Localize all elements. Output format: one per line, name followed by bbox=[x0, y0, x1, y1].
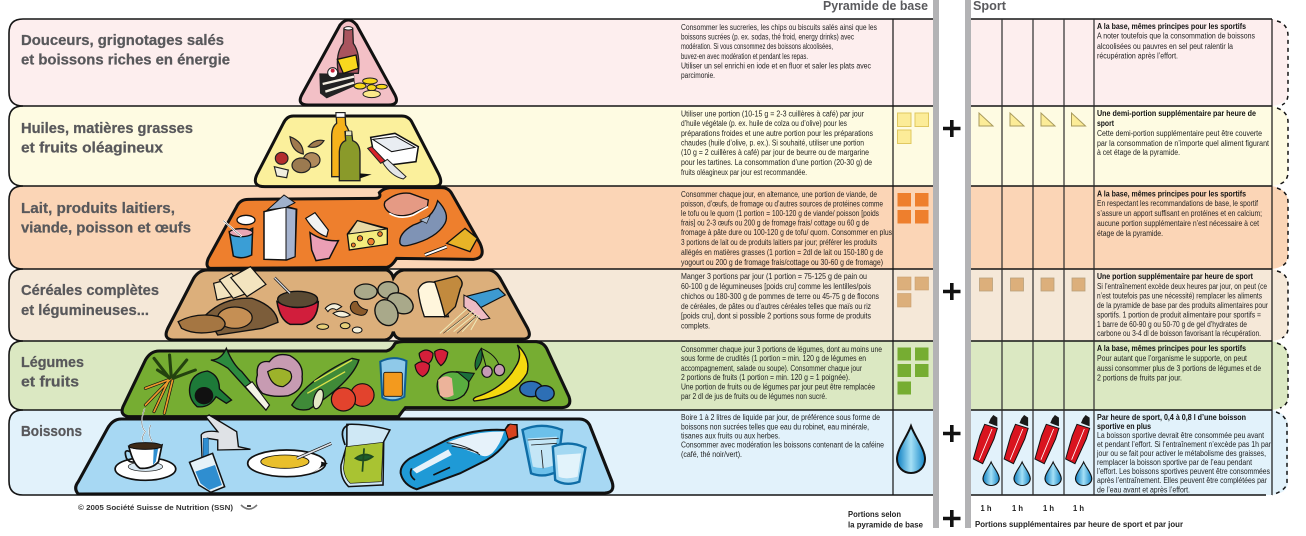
text: dairy recommendation: fromage à pâte dure ou 100-120 g de tofu/ quorn. Consommer en plus bbox=[681, 228, 892, 237]
sport text: cereals: de la pyramide de base par des produits alimentaires pour bbox=[1097, 301, 1268, 310]
sport text: cereals: carbone ou 3-4 dl de boisson favorisant la récupération. bbox=[1097, 329, 1261, 338]
sport text: vegetables: A la base, mêmes principes pour les sportifs bbox=[1097, 344, 1247, 353]
hour labels: 1 h bbox=[980, 504, 992, 513]
text: vegetables recommendation: accompagnement, salade ou soupe). Consommer chaque jour bbox=[681, 364, 862, 373]
copyright: © 2005 Société Suisse de Nutrition (SSN) bbox=[78, 503, 234, 512]
text: vegetables recommendation: 2 portions de fruits (1 portion = min. 120 g = 1 poignée). bbox=[681, 373, 850, 382]
heading: Lait bbox=[21, 200, 191, 236]
text: vegetables recommendation: Une portion de fruits ou de légumes par jour peut être remplacée bbox=[681, 382, 875, 392]
heading: Légumes bbox=[21, 354, 84, 390]
sport text: oils: Une demi-portion supplémentaire par heure de bbox=[1097, 109, 1257, 118]
text: beverages recommendation: Consommer avec modération les boissons contenant de la caféine bbox=[681, 440, 884, 450]
heading: Céréales: Céréales complètes bbox=[21, 282, 159, 299]
text: sweets recommendation: parcimonie. bbox=[681, 71, 715, 80]
footer label: base portions bbox=[848, 510, 924, 530]
text: oils recommendation: Utiliser une portion (10-15 g = 2-3 cuillères à café) par jour bbox=[681, 110, 864, 118]
dashed braces bbox=[1272, 21, 1288, 495]
text: vegetables recommendation: par 2 dl de jus de fruits ou de légumes non sucré. bbox=[681, 392, 827, 401]
text: dairy recommendation bbox=[681, 190, 892, 267]
text: sweets recommendation: boissons sucrées (p. ex. sodas, thé froid, energy drinks) avec bbox=[681, 33, 854, 42]
text: sweets recommendation: buvez-en avec modération et pendant les repas. bbox=[681, 52, 808, 61]
text: oils recommendation bbox=[681, 110, 873, 177]
text: sweets recommendation: Consommer les sucreries, les chips ou biscuits salés ainsi que les bbox=[681, 23, 877, 32]
sport text: beverages: sportive en plus bbox=[1097, 422, 1152, 431]
heading: Huiles bbox=[21, 120, 193, 156]
sport text: oils bbox=[1097, 109, 1270, 157]
heading: Boissons: Boissons bbox=[21, 423, 82, 440]
text: beverages recommendation bbox=[681, 413, 884, 459]
sport text: dairy: étage de la pyramide. bbox=[1097, 229, 1163, 238]
heading: Douceurs: Douceurs, grignotages salés bbox=[21, 32, 224, 49]
text: dairy recommendation: poisson, d’œufs, de fromage ou d’autres sources de protéines comme bbox=[681, 200, 883, 208]
text: oils recommendation: pour les tartines. La consommation d’une portion (20-30 g) de bbox=[681, 158, 872, 167]
pyramid level: dairy and meat bbox=[207, 188, 482, 268]
pyramid level: sweets bbox=[300, 20, 396, 105]
text: dairy recommendation: allégés en matières grasses (1 portion = 2dl de lait ou 150-180 g de bbox=[681, 248, 883, 257]
hour labels: 1 h bbox=[1073, 504, 1084, 513]
grey column bars bbox=[933, 0, 971, 528]
text: oils recommendation: (10 g = 2 cuillères à café) par jour de beurre ou de margarine bbox=[681, 148, 869, 157]
portion icons: oils bbox=[898, 113, 928, 144]
text: sweets recommendation: Utiliser un sel enrichi en iode et en fluor et saler les plats avec bbox=[681, 61, 871, 70]
footer label: base portions: Portions selon bbox=[848, 510, 901, 519]
sport text: sweets bbox=[1097, 22, 1255, 60]
sport text: oils: par la consommation de n’importe quel aliment figurant bbox=[1097, 139, 1270, 148]
text: oils recommendation: d’huile végétale (p. ex. huile de colza ou d’olive) pour les bbox=[681, 119, 847, 128]
text: dairy recommendation: Consommer chaque jour, en alternance, une portion de viande, de bbox=[681, 190, 877, 199]
text: cereals recommendation: 60-100 g de légumineuses [poids cru] comme les lentilles/pois bbox=[681, 282, 871, 291]
sport text: beverages: l’effort. Les boissons sportives peuvent être consommées bbox=[1097, 467, 1270, 476]
icon: water drop bbox=[897, 426, 925, 473]
text: vegetables recommendation: Consommer chaque jour 3 portions de légumes, dont au moins une bbox=[681, 345, 882, 354]
sport text: beverages: remplacer la boisson sportive par de l’eau pendant bbox=[1097, 458, 1253, 467]
pyramid level: cereals bbox=[166, 267, 529, 340]
sport text: cereals: 1 barre de 60-90 g ou 50-70 g de gel d’hydrates de bbox=[1097, 320, 1247, 329]
sport text: dairy: En respectant les recommandations de base, le sportif bbox=[1097, 199, 1259, 208]
heading: Légumes: et fruits bbox=[21, 374, 79, 390]
sport text: sweets: A noter toutefois que la consommation de boissons bbox=[1097, 32, 1255, 40]
text: sweets recommendation: modération. Si vous consommez des boissons alcoolisées, bbox=[681, 42, 833, 51]
heading: Huiles: Huiles, matières grasses bbox=[21, 120, 193, 137]
icon: SSN logo bbox=[241, 505, 257, 509]
heading: Douceurs: et boissons riches en énergie bbox=[21, 52, 230, 68]
sport text: vegetables bbox=[1097, 344, 1261, 382]
sport icons: bottles and drops bbox=[973, 415, 1092, 486]
sport text: sweets: A la base, mêmes principes pour les sportifs bbox=[1097, 22, 1247, 31]
sport text: dairy bbox=[1097, 190, 1262, 238]
sport text: beverages: après l’entraînement. Elles peuvent être complétées par bbox=[1097, 476, 1267, 485]
sport text: beverages: La boisson sportive devrait être consommée peu avant bbox=[1097, 431, 1265, 440]
text: dairy recommendation: yogourt ou 200 g de fromage frais/cottage ou 30-60 g de fromage) bbox=[681, 258, 883, 267]
text: beverages recommendation: Boire 1 à 2 litres de liquide par jour, de préférence sous forme de bbox=[681, 413, 880, 422]
heading: Céréales bbox=[21, 282, 159, 319]
sport icons: half portion triangles bbox=[979, 113, 1086, 126]
sport text: sweets: alcoolisées ou pauvres en sel peut ralentir la bbox=[1097, 42, 1234, 51]
text: vegetables recommendation bbox=[681, 345, 882, 401]
sport text: sweets: récupération après l’effort. bbox=[1097, 52, 1178, 60]
sport text: vegetables: Pour autant que l’organisme le supporte, on peut bbox=[1097, 354, 1248, 363]
hour labels: 1 h bbox=[1012, 504, 1023, 513]
sport text: beverages bbox=[1096, 413, 1271, 494]
heading: Légumes: Légumes bbox=[21, 354, 84, 371]
text: dairy recommendation: frais] ou 2-3 œufs ou 200 g de fromage frais/ cottage ou 60 g de bbox=[681, 218, 869, 228]
sport text: cereals: Si l’entraînement excède deux heures par jour, on peut (ce bbox=[1097, 282, 1267, 291]
sport text: oils: à cet étage de la pyramide. bbox=[1097, 148, 1180, 157]
text: dairy recommendation: 3 portions de lait ou de produits laitiers par jour; préférer les produits bbox=[681, 238, 877, 247]
pyramid level: beverages bbox=[76, 408, 613, 494]
sport text: vegetables: aussi consommer plus de 3 portions de légumes et de bbox=[1097, 364, 1261, 373]
text: cereals recommendation: de céréales, de pâtes ou d’autres céréales telles que maïs ou riz bbox=[681, 302, 871, 311]
sport text: cereals: n’est toutefois pas une nécessité) remplacer les aliments bbox=[1097, 292, 1262, 300]
sport text: dairy: aucune portion supplémentaire n’est nécessaire à cet bbox=[1097, 219, 1260, 228]
heading: Huiles: et fruits oléagineux bbox=[21, 140, 164, 156]
text: oils recommendation: préparations froides et une autre portion pour les préparations bbox=[681, 129, 873, 138]
text: cereals recommendation: complets. bbox=[681, 322, 710, 330]
heading: Lait: Lait, produits laitiers, bbox=[21, 200, 175, 217]
heading: Lait: viande, poisson et œufs bbox=[21, 220, 191, 236]
text: cereals recommendation: chichos ou 180-300 g de pommes de terre ou 45-75 g de flocons bbox=[681, 292, 879, 301]
sport text: cereals bbox=[1097, 272, 1268, 338]
text: cereals recommendation: Manger 3 portions par jour (1 portion = 75-125 g de pain ou bbox=[681, 272, 867, 281]
sport text: oils: Cette demi-portion supplémentaire peut être couverte bbox=[1097, 129, 1262, 138]
hour labels bbox=[980, 504, 1084, 513]
plus signs bbox=[943, 120, 960, 527]
text: cereals recommendation: [poids cru], dont si possible 2 portions sous forme de produits bbox=[681, 312, 871, 320]
sport text: oils: sport bbox=[1097, 119, 1114, 128]
sport icons: cereal squares bbox=[980, 278, 1085, 291]
sport text: beverages: jour ou se fait pour activer le métabolisme des graisses, bbox=[1096, 449, 1266, 458]
sport text: beverages: Par heure de sport, 0,4 à 0,8 l d’une boisson bbox=[1097, 413, 1246, 422]
text: beverages recommendation: tisanes aux fruits ou aux herbes. bbox=[681, 432, 780, 440]
pyramid level: oils bbox=[255, 113, 441, 187]
portion icons: dairy bbox=[898, 193, 928, 224]
footer label: extra portions: Portions supplémentaires par heure de sport et par jour bbox=[975, 520, 1183, 529]
sport text: vegetables: 2 portions de fruits par jour. bbox=[1097, 374, 1182, 382]
text: sweets recommendation bbox=[681, 23, 877, 80]
footer label: base portions: la pyramide de base bbox=[848, 520, 924, 530]
portion icons: cereals bbox=[898, 277, 928, 307]
portion icons: vegetables bbox=[898, 348, 928, 394]
sport text: dairy: s’assure un apport suffisant en protéines et en calcium; bbox=[1097, 209, 1262, 218]
heading: Céréales: et légumineuses... bbox=[21, 302, 149, 319]
text: oils recommendation: chaudes (huile d’olive, p. ex.). Si souhaité, utiliser une portion bbox=[681, 138, 864, 148]
text: beverages recommendation: boissons non sucrées telles que eau du robinet, eau minérale, bbox=[681, 422, 869, 432]
pyramid level: vegetables and fruits bbox=[122, 342, 570, 417]
text: cereals recommendation bbox=[681, 272, 879, 330]
sport text: dairy: A la base, mêmes principes pour les sportifs bbox=[1097, 190, 1247, 198]
text: vegetables recommendation: sous forme de crudités (1 portion = min. 120 g de légumes en bbox=[681, 354, 866, 363]
text: dairy recommendation: le tofu ou le quorn (1 portion = 100-120 g de viande/ poisson [poids bbox=[681, 209, 879, 218]
sport text: beverages: de l’eau avant et après l’effort. bbox=[1097, 486, 1190, 494]
sport text: cereals: Une portion supplémentaire par heure de sport bbox=[1097, 272, 1253, 281]
sport text: beverages: et pendant l’effort. Si l’entraînement n’excède pas 1h par bbox=[1097, 440, 1271, 449]
sport text: cereals: sportifs. 1 portion de produit alimentaire pour sportifs = bbox=[1097, 310, 1261, 320]
text: oils recommendation: fruits oléagineux par jour est recommandée. bbox=[681, 168, 807, 177]
hour labels: 1 h bbox=[1043, 504, 1054, 513]
text: beverages recommendation: (café, thé noir/vert). bbox=[681, 450, 742, 459]
heading: Douceurs bbox=[21, 32, 230, 68]
